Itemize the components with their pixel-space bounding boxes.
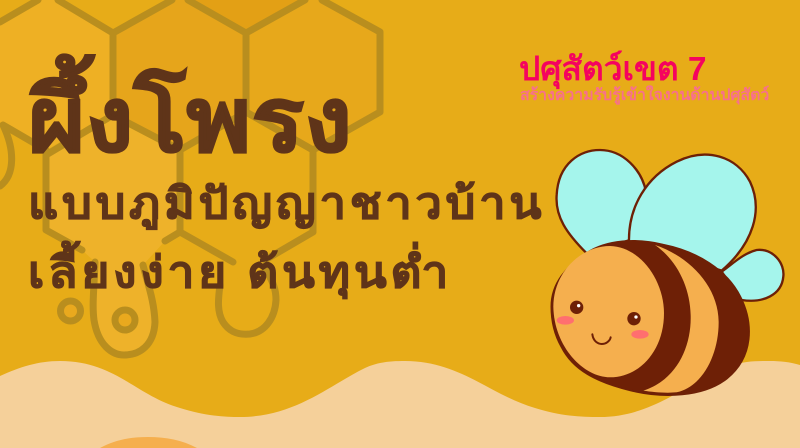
title: ผึ้งโพรง [28,71,352,171]
big wing [629,155,756,271]
body [552,241,749,395]
body stripe [643,245,719,393]
subtitle line 1: แบบภูมิปัญญาชาวบ้าน [28,180,545,228]
honey drips [60,262,276,355]
honeycomb pattern [0,0,380,355]
right cheek [631,330,649,339]
orange circle at bottom edge [100,437,197,448]
right eye [627,312,641,325]
left eye [570,301,583,314]
subtitle line 2: เลี้ยงง่าย ต้นทุนต่ำ [28,249,452,297]
back left wing [557,150,646,253]
head [553,246,664,377]
smile [592,334,611,344]
cream wave [0,361,800,448]
brand tagline: สร้างความรับรู้เข้าใจงานด้านปศุสัตว์ [520,87,769,104]
left cheek [557,316,574,325]
brand name: ปศุสัตว์เขต 7 [519,50,707,87]
icon: bee [552,150,783,395]
right small wing [722,250,783,301]
